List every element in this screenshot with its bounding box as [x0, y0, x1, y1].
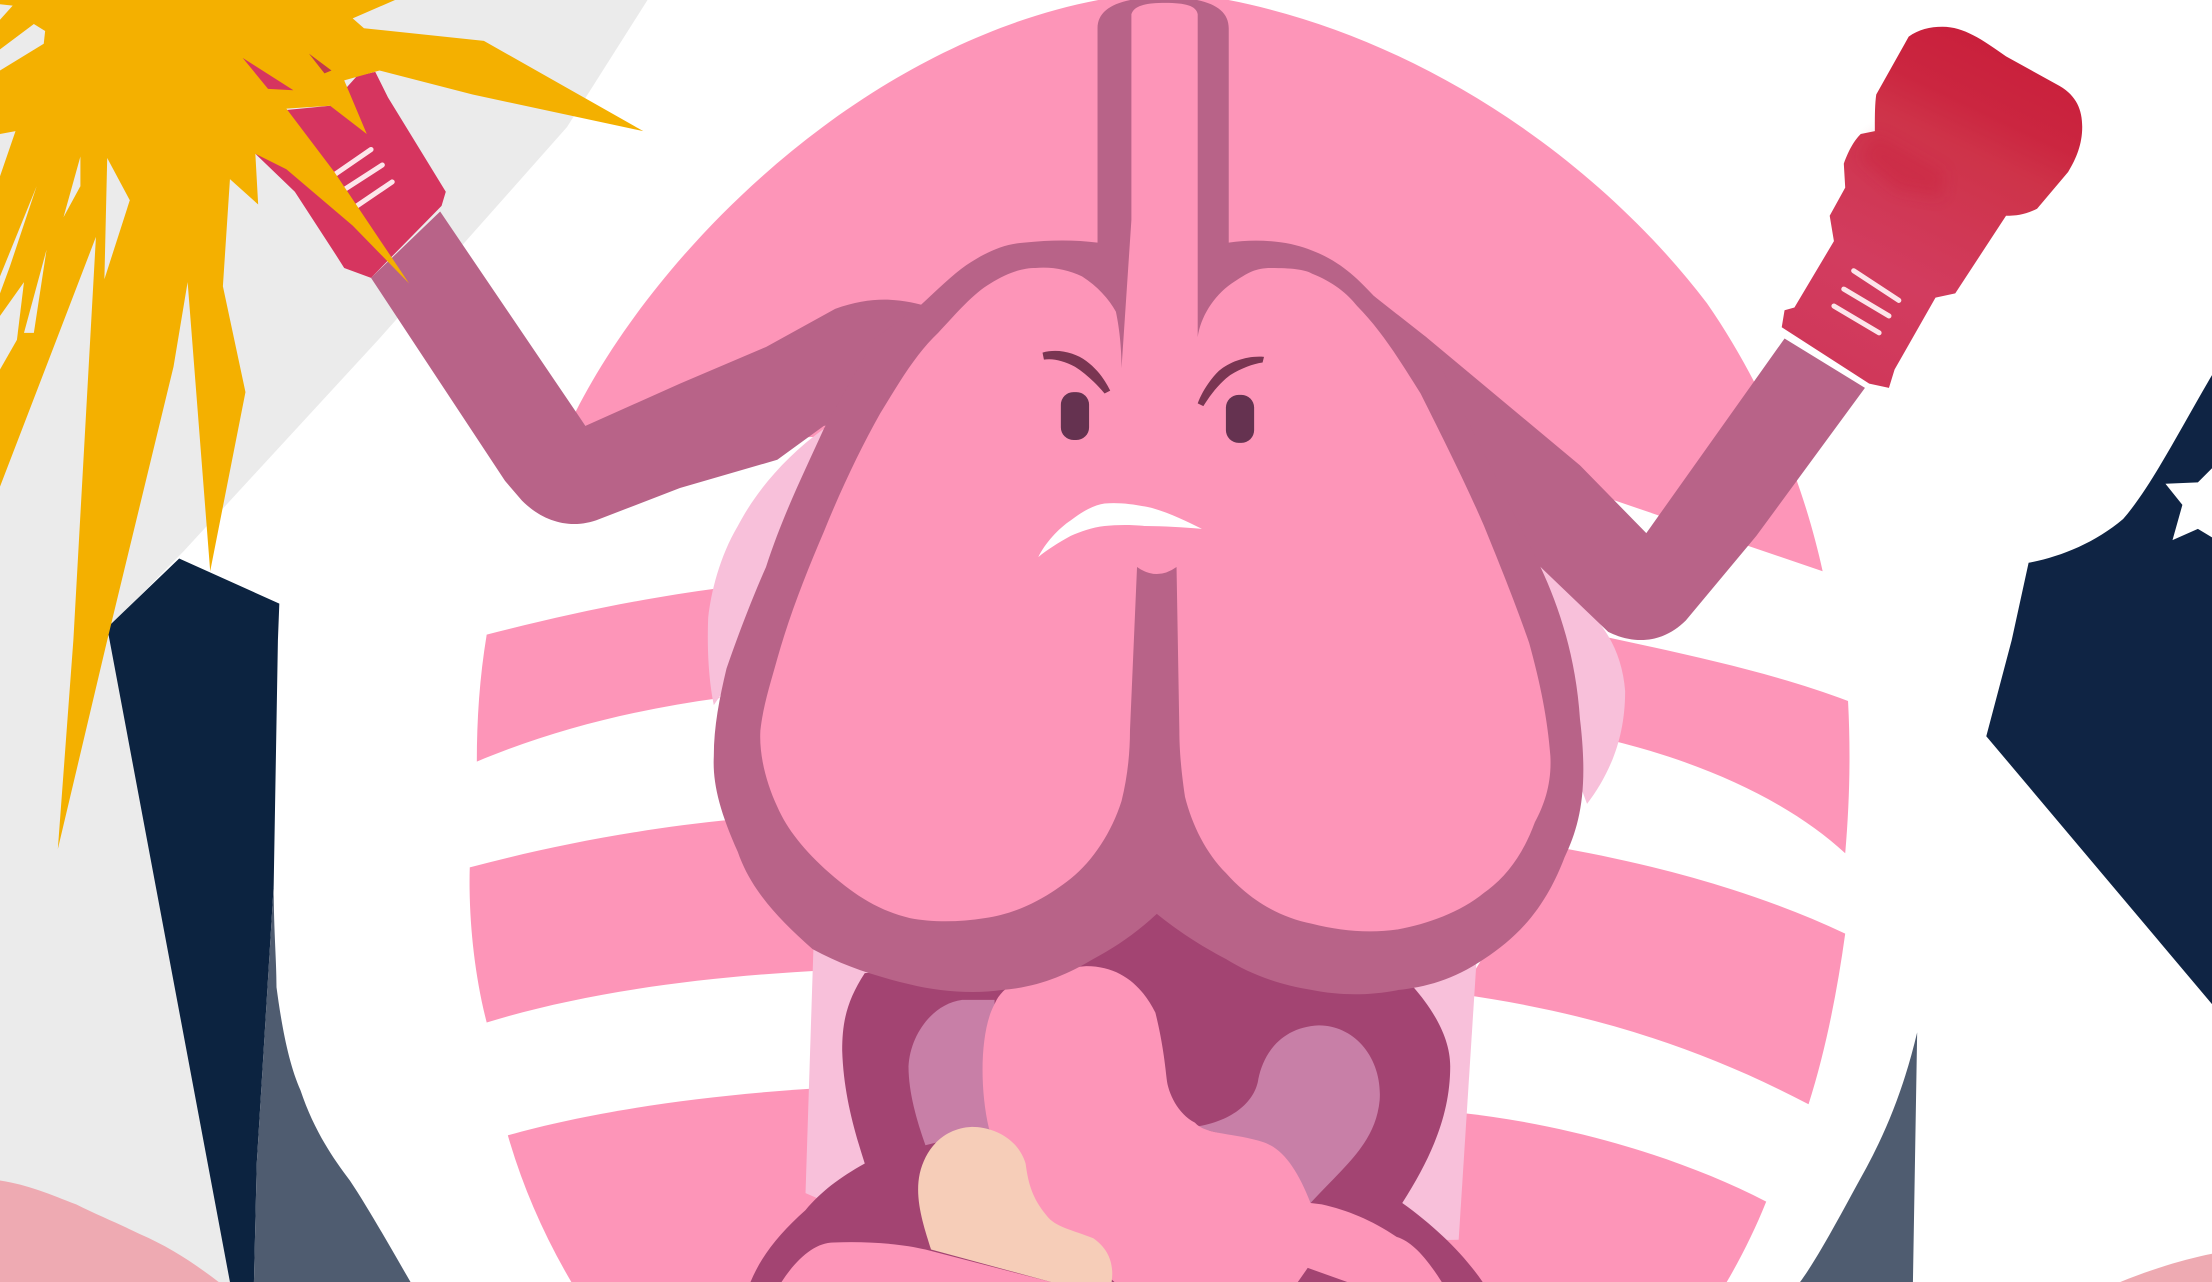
left arm — [371, 212, 931, 524]
left glove — [255, 72, 446, 278]
left opponent: navy body — [107, 558, 279, 1282]
lungs: pink inner — [760, 3, 1551, 931]
light pink side right of lungs — [1524, 567, 1625, 804]
organ: dark magenta surround — [750, 910, 1483, 1282]
right opponent: navy body — [1986, 375, 2212, 1004]
right glove — [1782, 27, 2082, 388]
lungs: dark outline and trachea — [714, 0, 1583, 994]
background: grey opponent area — [0, 0, 648, 1282]
right arm — [1374, 296, 1865, 640]
face: angry mouth — [1038, 503, 1202, 557]
rib: middle right — [1460, 846, 1845, 1104]
organs — [750, 910, 1483, 1282]
face: right eyebrow — [1198, 357, 1264, 406]
left opponent: pink shape at bottom — [0, 1180, 219, 1282]
burst: glove shard two — [309, 54, 332, 73]
rib: middle left — [470, 819, 825, 1022]
rib: lower left — [508, 1087, 832, 1282]
organ: peach pancreas — [918, 1127, 1112, 1282]
glove: stripes — [1834, 271, 1899, 333]
face: left eyebrow — [1043, 351, 1110, 393]
icon: star on right opponent — [2165, 468, 2212, 540]
right pink shape at bottom — [2120, 1254, 2212, 1282]
impact burst — [0, 0, 643, 849]
rib: upper right — [1594, 637, 1850, 853]
light pink side left of lungs — [708, 429, 824, 705]
glove: stripes — [330, 149, 392, 209]
glove: red body with shading — [1782, 27, 2082, 388]
organ: left lighter lobe — [908, 1000, 995, 1145]
right slate shape — [1800, 1032, 1917, 1282]
spine: light pink column — [806, 931, 1478, 1241]
burst: yellow rays — [0, 0, 643, 849]
glove: darker fold — [1859, 134, 1944, 197]
lungs — [714, 0, 1583, 994]
organ: stomach — [983, 966, 1442, 1282]
left slate shape — [254, 886, 411, 1282]
organ: lower intestine — [782, 1242, 1051, 1282]
face: right eye — [1226, 395, 1254, 443]
burst: glove shard one — [243, 58, 293, 90]
face: left eye — [1061, 392, 1089, 440]
ribs — [470, 588, 1850, 1282]
body: pink chest oval — [576, 0, 1823, 571]
glove: pink body — [255, 72, 446, 278]
burst: grey slits — [0, 4, 130, 370]
organ: right lighter lobe — [1195, 1025, 1380, 1203]
rib: upper left — [477, 588, 719, 762]
organ: dark notch at bottom — [1298, 1268, 1347, 1282]
rib: lower right — [1439, 1113, 1766, 1282]
